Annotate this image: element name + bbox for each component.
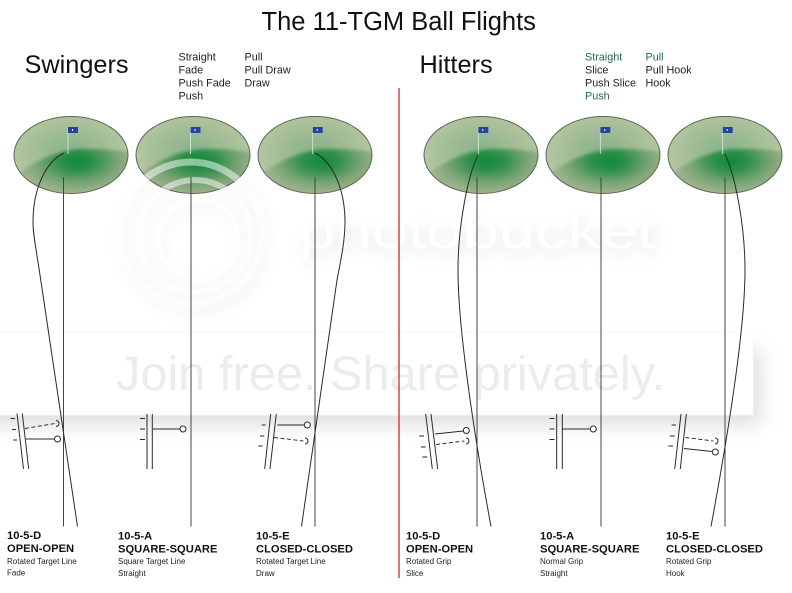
flight: draw	[302, 153, 345, 526]
caption: 10-5-D hitter	[406, 530, 473, 578]
watermark band: sign-up banner	[0, 332, 760, 424]
impact diagram: swinger square	[140, 414, 186, 469]
green: swingers straight	[129, 116, 257, 205]
caption: 10-5-D swinger: 10-5-D	[7, 530, 41, 542]
caption: 10-5-A hitter	[540, 530, 640, 578]
impact diagram: swinger open	[10, 414, 60, 469]
caption: 10-5-D swinger: Rotated Target Line	[7, 557, 77, 566]
impact diagram: hitter square	[550, 414, 596, 469]
title: The 11-TGM Ball Flights	[262, 8, 536, 36]
list: hitter ball flights: Pull Hook	[646, 65, 692, 77]
green: hitters hook	[661, 116, 789, 205]
flight: swinger straight	[190, 177, 192, 526]
impact diagram: swinger closed	[258, 414, 310, 469]
caption: 10-5-D swinger	[7, 530, 77, 578]
flight: hitter straight	[600, 177, 602, 526]
list: swinger ball flights	[178, 52, 291, 103]
caption: 10-5-A hitter: SQUARE-SQUARE	[540, 544, 640, 556]
caption: 10-5-E hitter: 10-5-E	[666, 530, 700, 542]
list: hitter ball flights: Push	[585, 91, 610, 103]
caption: 10-5-E hitter: Hook	[666, 569, 686, 578]
list: swinger ball flights: Pull	[244, 52, 263, 64]
watermark band: sign-up banner: Join free. Share privately.	[116, 348, 665, 401]
caption: 10-5-E swinger: CLOSED-CLOSED	[256, 544, 353, 556]
watermark: logo rings and wordmark	[120, 162, 655, 304]
list: hitter ball flights: Pull	[646, 52, 664, 64]
flight: slice	[458, 155, 491, 526]
watermark: logo rings and wordmark: photobucket	[299, 203, 655, 259]
list: hitter ball flights: Hook	[646, 78, 671, 90]
list: swinger ball flights: Pull Draw	[244, 65, 291, 77]
caption: 10-5-D swinger: Fade	[7, 568, 26, 578]
caption: 10-5-D hitter: Rotated Grip	[406, 557, 452, 566]
list: hitter ball flights	[585, 52, 692, 103]
list: swinger ball flights: Push	[178, 91, 203, 103]
caption: 10-5-E hitter: CLOSED-CLOSED	[666, 544, 763, 556]
red divider	[398, 88, 400, 578]
green: swingers draw	[251, 116, 379, 205]
heading: hitters: Hitters	[420, 51, 493, 79]
flight: fade	[33, 153, 78, 526]
list: swinger ball flights: Draw	[244, 78, 270, 90]
list: swinger ball flights: Push Fade	[178, 78, 231, 90]
caption: 10-5-A swinger: Square Target Line	[118, 557, 186, 566]
caption: 10-5-A swinger: SQUARE-SQUARE	[118, 544, 218, 556]
caption: 10-5-A hitter: Straight	[540, 569, 568, 578]
caption: 10-5-A hitter: 10-5-A	[540, 530, 574, 542]
caption: 10-5-D hitter: Slice	[406, 569, 424, 578]
caption: 10-5-A swinger: Straight	[118, 569, 146, 578]
caption: 10-5-E swinger: Rotated Target Line	[256, 557, 326, 566]
caption: 10-5-D swinger: OPEN-OPEN	[7, 543, 74, 555]
list: swinger ball flights: Straight	[178, 52, 216, 64]
flight: hook	[711, 154, 745, 526]
list: swinger ball flights: Fade	[178, 65, 203, 77]
caption: 10-5-A swinger: 10-5-A	[118, 530, 152, 542]
list: hitter ball flights: Slice	[585, 65, 608, 77]
list: hitter ball flights: Straight	[585, 52, 622, 64]
heading: swingers: Swingers	[24, 51, 129, 79]
green: hitters slice	[417, 116, 545, 205]
caption: 10-5-D hitter: 10-5-D	[406, 530, 440, 542]
flags and pins on greens	[68, 127, 733, 154]
green: hitters straight	[539, 116, 667, 205]
impact diagram: hitter open	[419, 414, 469, 469]
caption: 10-5-A swinger	[118, 530, 218, 578]
caption: 10-5-E swinger	[256, 530, 353, 578]
caption: 10-5-E hitter	[666, 530, 763, 578]
green: swingers fade	[7, 116, 135, 205]
caption: 10-5-E swinger: 10-5-E	[256, 530, 290, 542]
caption: 10-5-E swinger: Draw	[256, 569, 275, 578]
list: hitter ball flights: Push Slice	[585, 78, 636, 90]
caption: 10-5-E hitter: Rotated Grip	[666, 557, 712, 566]
impact diagram: hitter closed	[668, 414, 718, 469]
caption: 10-5-D hitter: OPEN-OPEN	[406, 544, 473, 556]
caption: 10-5-A hitter: Normal Grip	[540, 557, 584, 566]
